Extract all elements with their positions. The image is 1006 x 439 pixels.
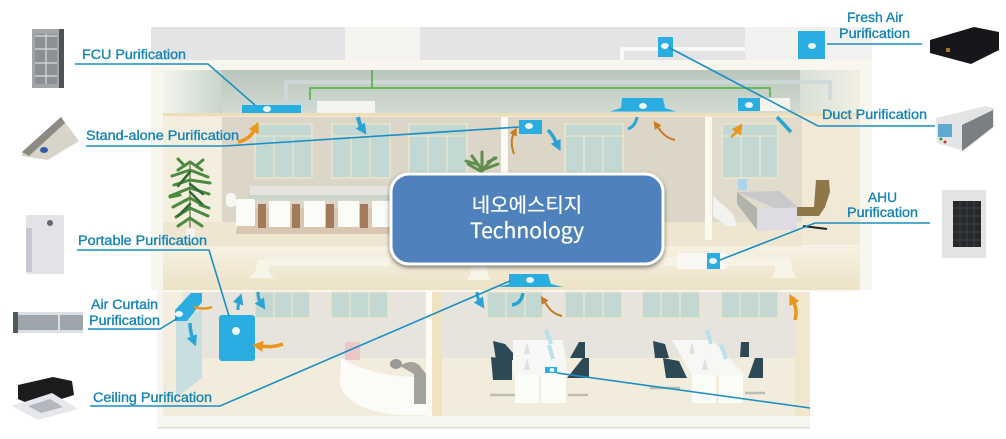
labels: Fresh Air	[847, 10, 904, 25]
blue airflow arrows	[190, 117, 791, 339]
labels: Purification	[89, 313, 160, 328]
labels: FCU Purification	[82, 47, 186, 62]
fresh air unit	[798, 31, 825, 59]
office furniture	[713, 179, 830, 232]
product: portable purifier	[26, 215, 64, 274]
labels: AHU	[868, 190, 897, 205]
product: air curtain	[13, 312, 83, 333]
labels: Duct Purification	[822, 107, 927, 122]
building cross-section	[151, 27, 872, 428]
labels: Ceiling Purification	[93, 390, 212, 405]
conference table and chairs	[226, 186, 399, 234]
unit badges	[175, 43, 816, 372]
title text: 네오에스티지	[472, 194, 582, 217]
labels	[78, 10, 927, 405]
product: duct purifier	[936, 106, 994, 151]
stand-alone unit	[519, 120, 542, 134]
labels: Portable Purification	[78, 233, 207, 248]
door	[176, 310, 202, 398]
office desks and chairs	[490, 330, 765, 403]
product: ceiling cassette	[12, 377, 78, 420]
product: stand-alone purifier	[22, 117, 79, 160]
central title box	[391, 174, 663, 264]
reception desk	[340, 342, 426, 415]
labels: Purification	[847, 205, 918, 220]
duct purification unit	[658, 37, 673, 57]
labels: Purification	[839, 26, 910, 41]
labels: Air Curtain	[91, 297, 158, 312]
product: FCU filter	[32, 29, 64, 88]
portable purifier	[219, 315, 255, 361]
ductwork	[248, 49, 830, 280]
product: fresh air unit	[930, 27, 999, 64]
lower windows	[255, 292, 778, 318]
ceiling cassette units	[498, 98, 760, 287]
AHU duct unit	[677, 253, 727, 269]
FCU units	[242, 100, 375, 113]
product: AHU filter	[942, 190, 986, 258]
subtitle text: Technology	[470, 215, 584, 245]
callout lines	[75, 44, 935, 408]
upper windows	[255, 124, 778, 178]
orange airflow arrows	[194, 126, 796, 347]
labels: Stand-alone Purification	[86, 128, 239, 143]
air curtain unit	[175, 293, 202, 321]
potted plants	[170, 152, 498, 245]
